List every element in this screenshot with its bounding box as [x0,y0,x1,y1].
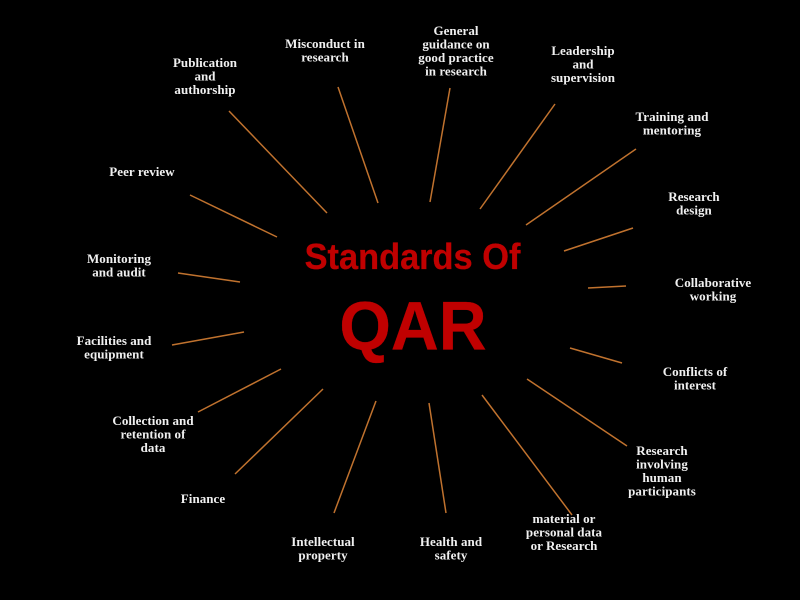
label: peer review: Peer review [109,164,175,179]
label: monitoring and audit: and audit [92,264,146,280]
label: misconduct in research: research [301,50,350,64]
title: QAR [339,288,487,365]
label: research involving human participants: involving [636,456,688,472]
label: publication and authorship: and [194,68,216,84]
spokes radiating from title [172,87,636,515]
label: collection and retention of data: retention of [121,426,186,442]
label: facilities and equipment: Facilities and [77,333,152,348]
label: health and safety: Health and [420,534,483,549]
label: training and mentoring: Training and [636,109,709,124]
label: monitoring and audit: Monitoring [87,251,151,266]
label: intellectual property: Intellectual [291,534,355,549]
label: collaborative working: working [690,288,737,304]
label: collection and retention of data: Collection and [112,413,194,428]
label: collaborative working: Collaborative [675,275,751,290]
label: facilities and equipment: equipment [84,346,144,362]
label: material or personal data: personal data [526,524,603,540]
label: training and mentoring: mentoring [643,122,702,138]
label: general guidance: good practice [418,50,494,65]
label: health and safety: safety [435,548,468,562]
label: research involving human participants: human [642,470,682,485]
label: conflicts of interest: Conflicts of [663,364,728,379]
label: intellectual property: property [298,548,348,562]
title [305,237,521,365]
labels [77,23,751,562]
label: leadership and supervision: supervision [551,70,616,85]
label: leadership and supervision: and [572,56,594,72]
label: publication and authorship: Publication [173,55,238,70]
label: research involving human participants: Research [636,443,688,458]
label: material or personal data: material or [532,511,596,526]
label: conflicts of interest: interest [674,378,717,392]
label: general guidance: General [433,23,479,38]
label: research involving human participants: participants [628,484,696,498]
label: research design: design [676,202,713,218]
label: publication and authorship: authorship [174,82,236,97]
label: general guidance: in research [425,64,488,78]
label: finance: Finance [181,491,225,506]
label: leadership and supervision: Leadership [551,43,615,58]
label: general guidance: guidance on [422,36,490,52]
title: Standards Of [305,237,521,277]
label: material or personal data: or Research [531,538,598,553]
label: research design: Research [668,189,720,204]
label: misconduct in research: Misconduct in [285,36,366,51]
label: collection and retention of data: data [141,440,166,455]
